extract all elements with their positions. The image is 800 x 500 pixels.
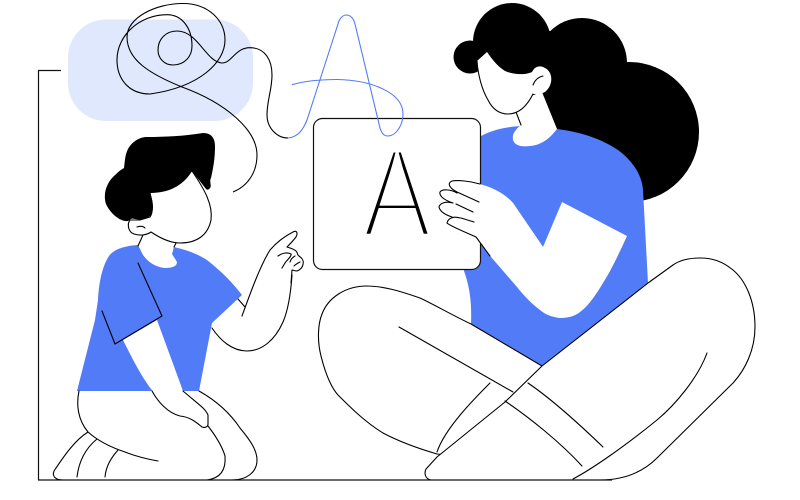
back leg [318, 286, 560, 470]
boy neck lines [138, 235, 176, 247]
ear mark [533, 76, 543, 85]
boy ear mark [137, 226, 145, 228]
foot lines [77, 439, 118, 477]
woman shirt [464, 126, 648, 366]
boy pointing arm [212, 231, 303, 351]
sleeve line [102, 263, 162, 344]
letter A on the card: A [362, 122, 432, 265]
woman neck [513, 92, 557, 146]
leg fold lines [399, 327, 707, 479]
arm outline [212, 231, 303, 351]
woman arm [477, 185, 627, 318]
front leg [425, 258, 755, 480]
pants [78, 392, 225, 479]
neck line [516, 112, 521, 125]
boy [53, 133, 303, 480]
woman hair [454, 3, 699, 202]
blue handwritten letter A line [288, 15, 403, 138]
hand fill [439, 181, 543, 256]
thumb and curled fingers [278, 253, 300, 283]
outer knee [199, 391, 257, 480]
boy arm left [123, 320, 183, 392]
letter card [314, 118, 480, 270]
boy face [128, 171, 211, 243]
resting arm and hand [152, 391, 208, 427]
sleeve cuff [238, 299, 245, 307]
frame line [38, 70, 61, 480]
black scribble thought line [117, 4, 288, 192]
face contour [477, 61, 533, 114]
light blue speech blob [68, 20, 253, 121]
woman face [477, 52, 551, 114]
woman legs [318, 258, 755, 480]
ground line [38, 479, 612, 481]
finger outlines [439, 181, 490, 256]
boy legs [53, 391, 257, 480]
woman [454, 3, 699, 366]
pants lines [78, 391, 158, 461]
foot [53, 432, 88, 480]
boy hair [105, 133, 215, 221]
woman hand [439, 181, 543, 256]
knee [207, 426, 225, 480]
boy shirt [77, 245, 242, 391]
